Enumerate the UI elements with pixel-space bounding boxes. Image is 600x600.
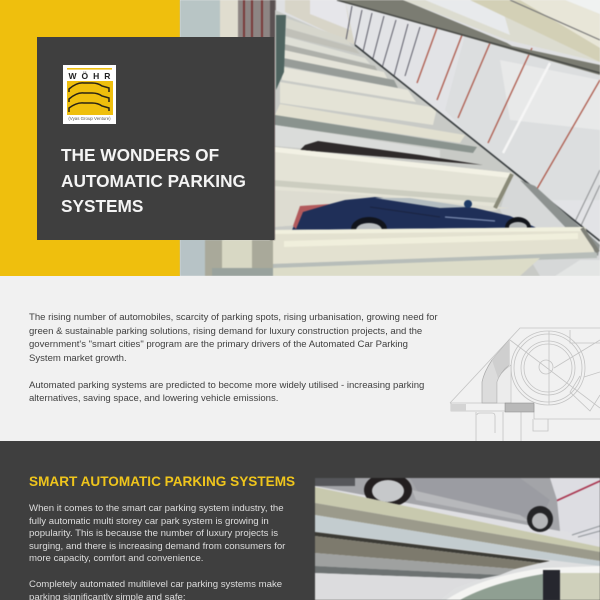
top beams	[337, 0, 600, 75]
dark teal frame column	[276, 15, 286, 90]
hero title panel	[37, 37, 274, 240]
hero photo: automated parking shaft with blue car	[179, 0, 600, 276]
title: THE WONDERS OF	[61, 145, 219, 165]
intro text: The rising number of automobiles, scarcity of parking spots, rising urbanisation, growing need for	[29, 312, 438, 323]
hero yellow band	[0, 0, 180, 276]
lower beam	[273, 227, 595, 264]
section text: surging, and there is increasing demand from consumers for	[29, 541, 285, 552]
logo: Wöhr	[63, 65, 116, 124]
red posts	[417, 28, 600, 213]
intro text: government's "smart cities" program are the primary drivers of the Automated Car Parking	[29, 339, 408, 350]
section text: Completely automated multilevel car parking systems make	[29, 579, 282, 590]
wall posts	[346, 6, 420, 76]
section text: fully automatic multi storey car park system is growing in	[29, 516, 269, 527]
silver car	[315, 473, 560, 532]
wall and red pipe	[550, 478, 600, 540]
logo caption: (Vyas Group Venture)	[68, 116, 111, 121]
intro text: Automated parking systems are predicted to become more widely utilised - increasing parking	[29, 380, 424, 391]
blue car	[292, 197, 537, 241]
title	[61, 145, 246, 216]
blueprint line drawing of parking system	[450, 328, 600, 441]
white car	[446, 566, 600, 600]
white wall panels	[345, 0, 600, 240]
left shelves triangle base	[275, 10, 600, 276]
upper shelf stack	[275, 18, 477, 160]
far shaft top	[285, 0, 355, 45]
pallet beam	[315, 487, 600, 600]
logo wordmark: WÖHR	[69, 70, 115, 80]
dark section background	[0, 441, 600, 600]
title: SYSTEMS	[61, 196, 143, 216]
beige pallet	[273, 147, 512, 227]
section heading: SMART AUTOMATIC PARKING SYSTEMS	[29, 474, 295, 489]
title: AUTOMATIC PARKING	[61, 170, 246, 190]
section text: When it comes to the smart car parking system industry, the	[29, 503, 284, 514]
intro section background	[0, 276, 600, 441]
photo: cars on parking pallets	[314, 477, 600, 600]
section text: more capacity, comfort and convenience.	[29, 553, 203, 564]
intro text: System market growth.	[29, 353, 127, 364]
section text	[29, 503, 286, 600]
intro text	[29, 312, 438, 404]
intro text: green & sustainable parking solutions, rising demand for luxury construction projects, and the	[29, 326, 422, 337]
dark car on upper shelf	[300, 141, 483, 165]
intro text: alternatives, saving space, and lowering vehicle emissions.	[29, 393, 278, 404]
section text: popularity. This is because the number of luxury projects is	[29, 528, 278, 539]
diagonal rail	[355, 45, 600, 241]
